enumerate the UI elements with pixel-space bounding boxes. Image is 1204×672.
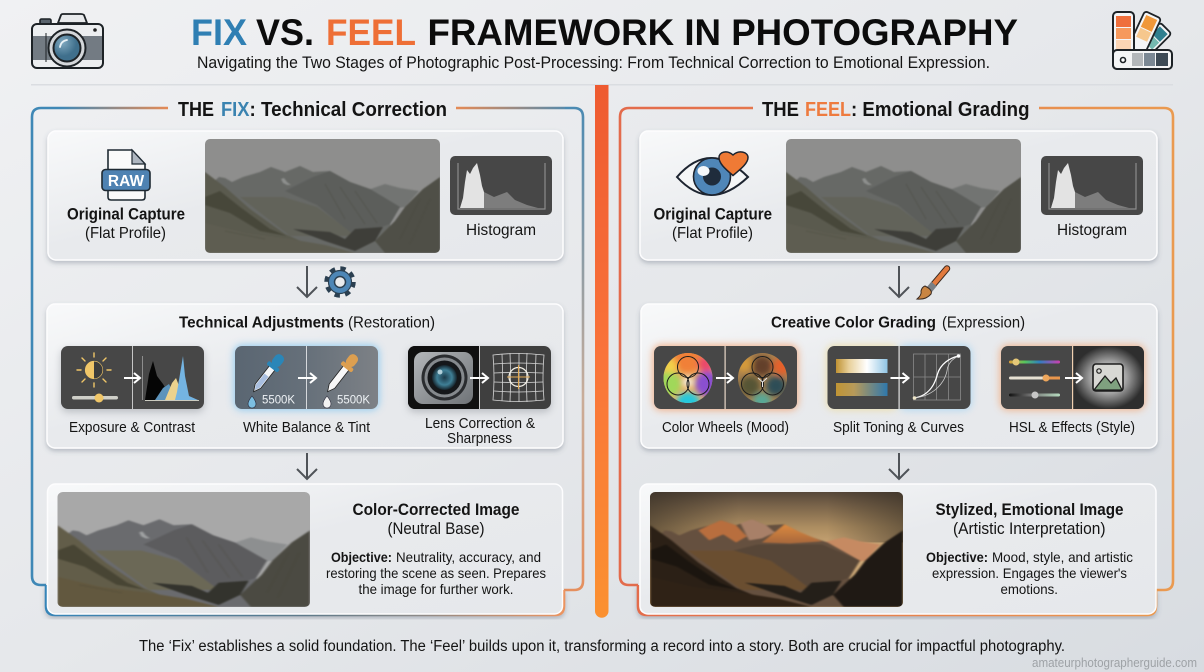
label: exposure and contrast: Exposure & Contrast [69, 420, 195, 436]
icon: color swatch palette [1113, 11, 1172, 69]
icon: eye with heart [677, 152, 748, 195]
heading: the feel: FEEL [805, 98, 851, 121]
tile: white balance: 5500K [262, 394, 295, 406]
arrow: capture to grading [889, 266, 909, 297]
label: original capture [67, 206, 185, 242]
chart: histogram [1041, 156, 1143, 215]
footer statement: The ‘Fix’ establishes a solid foundation. The ‘Feel’ builds upon it, transforming a record into a story. Both are crucial for impactful photography. [139, 638, 1065, 655]
heading: the feel: THE [762, 98, 799, 121]
text: fix objective: Objective: [331, 549, 392, 565]
text: feel objective: Mood, style, and artistic [992, 549, 1133, 565]
card: stylized image [638, 484, 1156, 615]
card: creative color grading [641, 304, 1157, 448]
subtitle: Navigating the Two Stages of Photographic Post-Processing: From Technical Correction to Emotional Expression. [197, 53, 990, 72]
heading: technical adjustments: Technical Adjustments [179, 314, 344, 332]
text: stylized title: (Artistic Interpretation) [953, 520, 1106, 538]
heading: the fix: : Technical Correction [250, 98, 447, 121]
label: original capture: (Flat Profile) [85, 225, 166, 242]
photo: flat capture [786, 139, 1021, 253]
text: fix objective: the image for further work. [358, 581, 514, 597]
icon: raw file: RAW [108, 173, 144, 190]
panel: the feel [620, 98, 1173, 615]
tile: white balance [234, 345, 379, 410]
tile: white balance: 5500K [337, 394, 370, 406]
heading: the feel [762, 98, 1030, 121]
heading: technical adjustments [179, 314, 435, 332]
label: color wheels: Color Wheels (Mood) [662, 420, 789, 436]
icon: camera [32, 14, 103, 68]
label: hsl and effects: HSL & Effects (Style) [1009, 420, 1135, 436]
icon: paint brush [917, 268, 947, 299]
text: fix objective: restoring the scene as seen. Prepares [326, 565, 546, 581]
arrow: adjustments to result [297, 453, 317, 479]
tile: color wheels [653, 343, 798, 416]
photo: flat capture [205, 139, 440, 253]
photo: warm graded mountains [650, 492, 903, 607]
center divider bar [595, 85, 608, 618]
label: split toning and curves: Split Toning & Curves [833, 420, 964, 436]
title: FIX [191, 11, 247, 53]
heading: the feel: : Emotional Grading [851, 98, 1030, 121]
title: FEEL [326, 11, 416, 53]
text: fix objective [326, 549, 546, 597]
label: lens correction: Lens Correction & [425, 416, 535, 432]
heading: the fix: THE [178, 98, 214, 121]
panel: the fix [32, 98, 583, 615]
heading: the fix: FIX [221, 98, 250, 121]
tile: exposure and contrast [61, 346, 204, 412]
card: original capture [48, 131, 563, 260]
label: original capture: Original Capture [67, 206, 185, 224]
panel frame: feel [620, 108, 1173, 590]
label: original capture: (Flat Profile) [672, 225, 753, 242]
label: white balance: White Balance & Tint [243, 420, 370, 436]
text: color-corrected title [352, 501, 520, 538]
header divider [31, 84, 1173, 86]
label: original capture [654, 206, 772, 242]
arrow: grading to result [889, 453, 909, 479]
arrow: capture to adjustments [297, 266, 317, 297]
text: fix objective: Neutrality, accuracy, and [396, 549, 541, 565]
heading: creative color grading [771, 314, 1025, 332]
heading: technical adjustments: (Restoration) [348, 314, 435, 332]
text: stylized title [936, 501, 1124, 538]
card: technical adjustments [47, 304, 563, 448]
label: histogram: Histogram [466, 222, 536, 239]
panel frame: fix [32, 108, 583, 590]
text: feel objective: Objective: [926, 549, 988, 565]
text: feel objective: expression. Engages the viewer's [932, 565, 1127, 581]
heading: the fix [178, 98, 447, 121]
title: FRAMEWORK IN PHOTOGRAPHY [428, 11, 1018, 53]
card: color-corrected image [46, 484, 564, 615]
text: feel objective: emotions. [1000, 581, 1058, 597]
text: stylized title: Stylized, Emotional Image [936, 501, 1124, 519]
heading: creative color grading: (Expression) [942, 314, 1025, 332]
label: lens correction [425, 416, 535, 447]
tile: split toning and curves [826, 345, 972, 410]
icon: raw file [102, 150, 150, 200]
title: VS. [256, 11, 314, 53]
chart: histogram [450, 156, 552, 215]
icon: gear [327, 269, 353, 295]
tile: hsl and effects [1000, 345, 1145, 410]
label: original capture: Original Capture [654, 206, 772, 224]
tile: lens correction [408, 346, 551, 412]
text: color-corrected title: (Neutral Base) [388, 520, 484, 538]
photo: neutral base [58, 492, 310, 607]
label: histogram: Histogram [1057, 222, 1127, 239]
text: color-corrected title: Color-Corrected Image [352, 501, 520, 519]
text: feel objective [926, 549, 1133, 597]
card: original capture [640, 131, 1157, 260]
heading: creative color grading: Creative Color Grading [771, 314, 936, 332]
label: lens correction: Sharpness [447, 431, 512, 447]
